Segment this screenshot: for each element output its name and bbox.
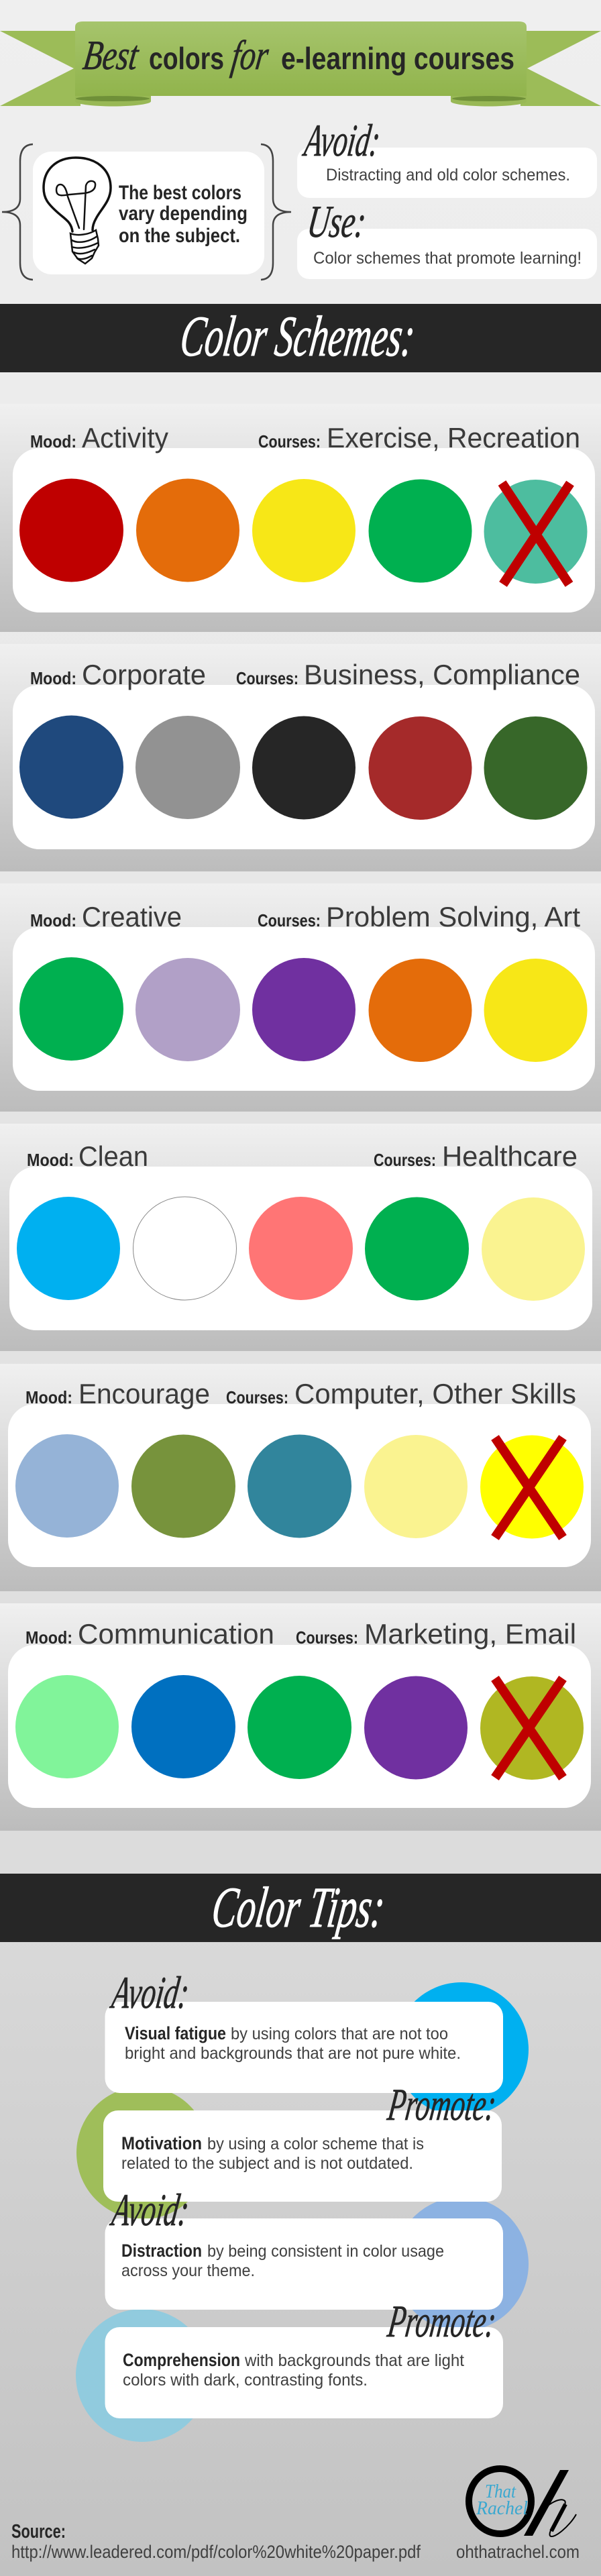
banner heading: Color Tips:	[208, 1875, 389, 1939]
mood label: Activity	[82, 422, 168, 453]
panel: corporate	[0, 644, 601, 871]
logo: oh that rachel: That	[485, 2481, 516, 2502]
title text: Best	[80, 32, 142, 78]
tip heading: Avoid:	[107, 1967, 193, 2018]
mood label	[25, 1378, 210, 1409]
source credit: Source:	[11, 2521, 66, 2542]
title ribbon	[0, 21, 601, 106]
tip: comprehension	[105, 2296, 503, 2418]
intro: lightbulb message	[2, 144, 291, 280]
intro: use callout	[297, 196, 597, 279]
swatch card	[13, 927, 595, 1091]
swatch card	[13, 685, 595, 849]
mood label: Mood:	[30, 668, 76, 688]
tip text: colors with dark, contrasting fonts.	[123, 2371, 368, 2390]
tip card	[105, 2327, 503, 2418]
courses label: Problem Solving, Art	[326, 901, 580, 932]
message text: vary depending	[119, 203, 248, 225]
panel: communication	[0, 1603, 601, 1831]
ribbon centre	[75, 21, 527, 96]
courses label: Courses:	[258, 431, 321, 451]
source credit	[11, 2521, 421, 2562]
mood label: Mood:	[30, 910, 76, 930]
icon: red cross	[502, 483, 570, 584]
courses label: Courses:	[258, 910, 321, 930]
message text: The best colors	[119, 182, 241, 204]
courses label	[374, 1140, 578, 1172]
tip text: by using a color scheme that is	[207, 2135, 424, 2153]
panel: encourage	[0, 1364, 601, 1591]
mood label	[30, 901, 182, 932]
tip text: by using colors that are not too	[231, 2025, 448, 2043]
title text: e-learning courses	[281, 41, 514, 76]
source credit: http://www.leadered.com/pdf/color%20white%20paper.pdf	[11, 2542, 421, 2562]
color swatches	[19, 479, 588, 584]
swatch card	[8, 1404, 591, 1567]
mood label: Mood:	[25, 1627, 72, 1648]
swatch card	[13, 448, 595, 612]
use card	[297, 229, 597, 279]
panel: creative	[0, 883, 601, 1112]
right brace	[261, 144, 291, 280]
ribbon tails	[0, 31, 601, 106]
mood label	[27, 1140, 148, 1172]
mood label: Encourage	[78, 1378, 210, 1409]
tip text	[121, 2133, 424, 2173]
color swatches	[15, 1675, 584, 1780]
tip heading: Promote:	[384, 2296, 500, 2347]
decorative tip circles	[76, 1982, 529, 2442]
mood label: Clean	[78, 1140, 148, 1172]
tip text: Visual fatigue	[125, 2023, 226, 2043]
courses label: Courses:	[226, 1387, 288, 1407]
tip text: bright and backgrounds that are not pure white.	[125, 2044, 461, 2063]
tip text: Comprehension	[123, 2350, 240, 2370]
mood label: Mood:	[30, 431, 76, 451]
message card	[33, 152, 264, 274]
tip heading: Avoid:	[107, 2184, 193, 2235]
tip: motivation	[103, 2079, 502, 2202]
avoid card	[297, 148, 597, 198]
avoid text: Distracting and old color schemes.	[326, 166, 570, 184]
ribbon folds	[75, 96, 527, 106]
tip text: Distraction	[121, 2241, 202, 2261]
title text: for	[229, 32, 272, 78]
tip text: related to the subject and is not outdated.	[121, 2154, 413, 2173]
tip card	[105, 2002, 503, 2093]
courses label: Exercise, Recreation	[327, 422, 580, 453]
courses label: Marketing, Email	[364, 1618, 576, 1650]
website credit: ohthatrachel.com	[456, 2542, 580, 2562]
swatch card	[8, 1645, 591, 1808]
logo: oh that rachel	[469, 2469, 576, 2536]
courses label: Computer, Other Skills	[294, 1378, 576, 1409]
swatch card	[9, 1167, 592, 1330]
tip text	[121, 2241, 444, 2280]
tip card	[105, 2218, 503, 2310]
courses label: Courses:	[296, 1627, 358, 1648]
logo: oh that rachel: Rachel	[476, 2498, 528, 2519]
panel: clean	[0, 1124, 601, 1351]
tip: distraction	[105, 2184, 503, 2310]
courses label: Healthcare	[442, 1140, 578, 1172]
title text	[80, 32, 514, 78]
tip text: with backgrounds that are light	[244, 2351, 464, 2370]
banner heading: Color Schemes:	[176, 304, 419, 368]
courses label: Courses:	[236, 668, 298, 688]
tip text	[123, 2350, 464, 2390]
icon: red cross	[495, 1678, 563, 1778]
intro: avoid callout	[297, 115, 597, 198]
courses label: Courses:	[374, 1150, 436, 1170]
tip card	[103, 2110, 502, 2202]
panel: activity	[0, 404, 601, 632]
courses label: Business, Compliance	[304, 659, 580, 690]
use heading: Use:	[305, 196, 370, 247]
icon: red cross	[495, 1438, 563, 1538]
mood label: Communication	[78, 1618, 274, 1650]
tip text: across your theme.	[121, 2261, 255, 2280]
mood label	[30, 422, 168, 453]
tip: visual fatigue	[105, 1967, 503, 2093]
avoid heading: Avoid:	[300, 115, 384, 166]
color swatches	[19, 957, 588, 1062]
section banner: color tips	[0, 1874, 601, 1942]
mood label: Creative	[82, 901, 182, 932]
title text: colors	[149, 41, 224, 76]
color swatches	[19, 715, 588, 820]
use text: Color schemes that promote learning!	[313, 249, 582, 268]
tip text	[125, 2023, 461, 2063]
message text	[119, 182, 248, 247]
left brace	[2, 144, 33, 280]
mood label: Corporate	[82, 659, 206, 690]
color swatches	[17, 1197, 585, 1301]
section banner: color schemes	[0, 304, 601, 372]
message text: on the subject.	[119, 225, 240, 247]
icon: lightbulb	[44, 158, 111, 264]
mood label: Mood:	[27, 1150, 74, 1170]
tip heading: Promote:	[384, 2079, 500, 2130]
mood label: Mood:	[25, 1387, 72, 1407]
color swatches	[15, 1434, 584, 1539]
tip text: by being consistent in color usage	[207, 2242, 444, 2261]
tip text: Motivation	[121, 2133, 202, 2153]
